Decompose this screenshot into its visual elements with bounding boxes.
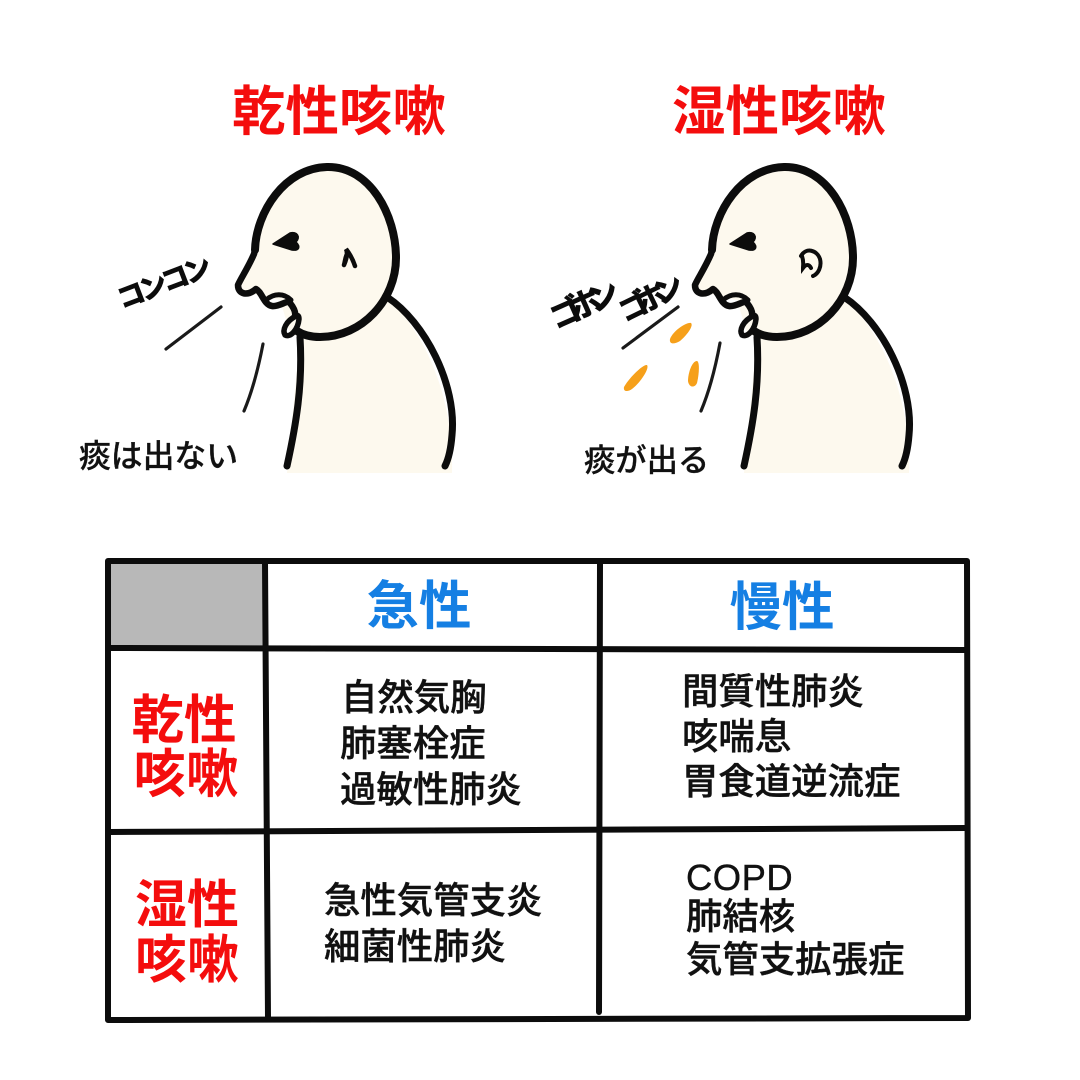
table grid [108, 561, 968, 1020]
cell: wet chronic: 気管支拡張症 [686, 939, 904, 980]
row label: wet cough: 湿性 [135, 877, 239, 935]
sound text: kon kon: コンコン [113, 251, 216, 315]
icon: ear [344, 249, 355, 266]
title: wet cough: 湿性咳嗽 [672, 83, 886, 142]
motion line: upper [623, 307, 678, 348]
cell: wet chronic: 肺結核 [686, 896, 795, 937]
cell: dry acute: 肺塞栓症 [340, 723, 486, 764]
sound text: gohon 2: ゴホン [613, 268, 689, 328]
cell: dry acute: 自然気胸 [341, 677, 487, 718]
phlegm droplets [624, 323, 699, 391]
figure: dry cough person [113, 167, 453, 473]
row label: dry cough: 咳嗽 [133, 745, 239, 804]
motion line: lower [701, 343, 720, 411]
cell: wet chronic: COPD [686, 857, 793, 898]
cell: dry acute: 過敏性肺炎 [340, 769, 522, 810]
row label: dry cough: 乾性 [131, 691, 237, 750]
header: chronic: 慢性 [729, 578, 835, 637]
figure: wet cough person [545, 167, 910, 473]
table [108, 561, 968, 1020]
title: dry cough: 乾性咳嗽 [232, 83, 446, 142]
icon: ear [801, 251, 821, 276]
cell: dry chronic: 咳喘息 [682, 716, 791, 757]
cell: wet acute: 急性気管支炎 [324, 880, 542, 921]
header: acute: 急性 [366, 577, 472, 636]
motion line: upper [166, 307, 221, 349]
cell: wet acute: 細菌性肺炎 [324, 926, 506, 967]
icon: eye [273, 233, 299, 250]
caption: no phlegm: 痰は出ない [79, 438, 238, 474]
sound text: gohon 1: ゴホン [545, 274, 625, 335]
row label: wet cough: 咳嗽 [135, 932, 239, 990]
gray corner cell [108, 562, 265, 648]
cell: dry chronic: 胃食道逆流症 [682, 761, 900, 802]
caption: phlegm: 痰が出る [584, 443, 709, 478]
motion line: lower [244, 344, 263, 411]
icon: eye [730, 233, 756, 250]
cell: dry chronic: 間質性肺炎 [682, 671, 864, 712]
